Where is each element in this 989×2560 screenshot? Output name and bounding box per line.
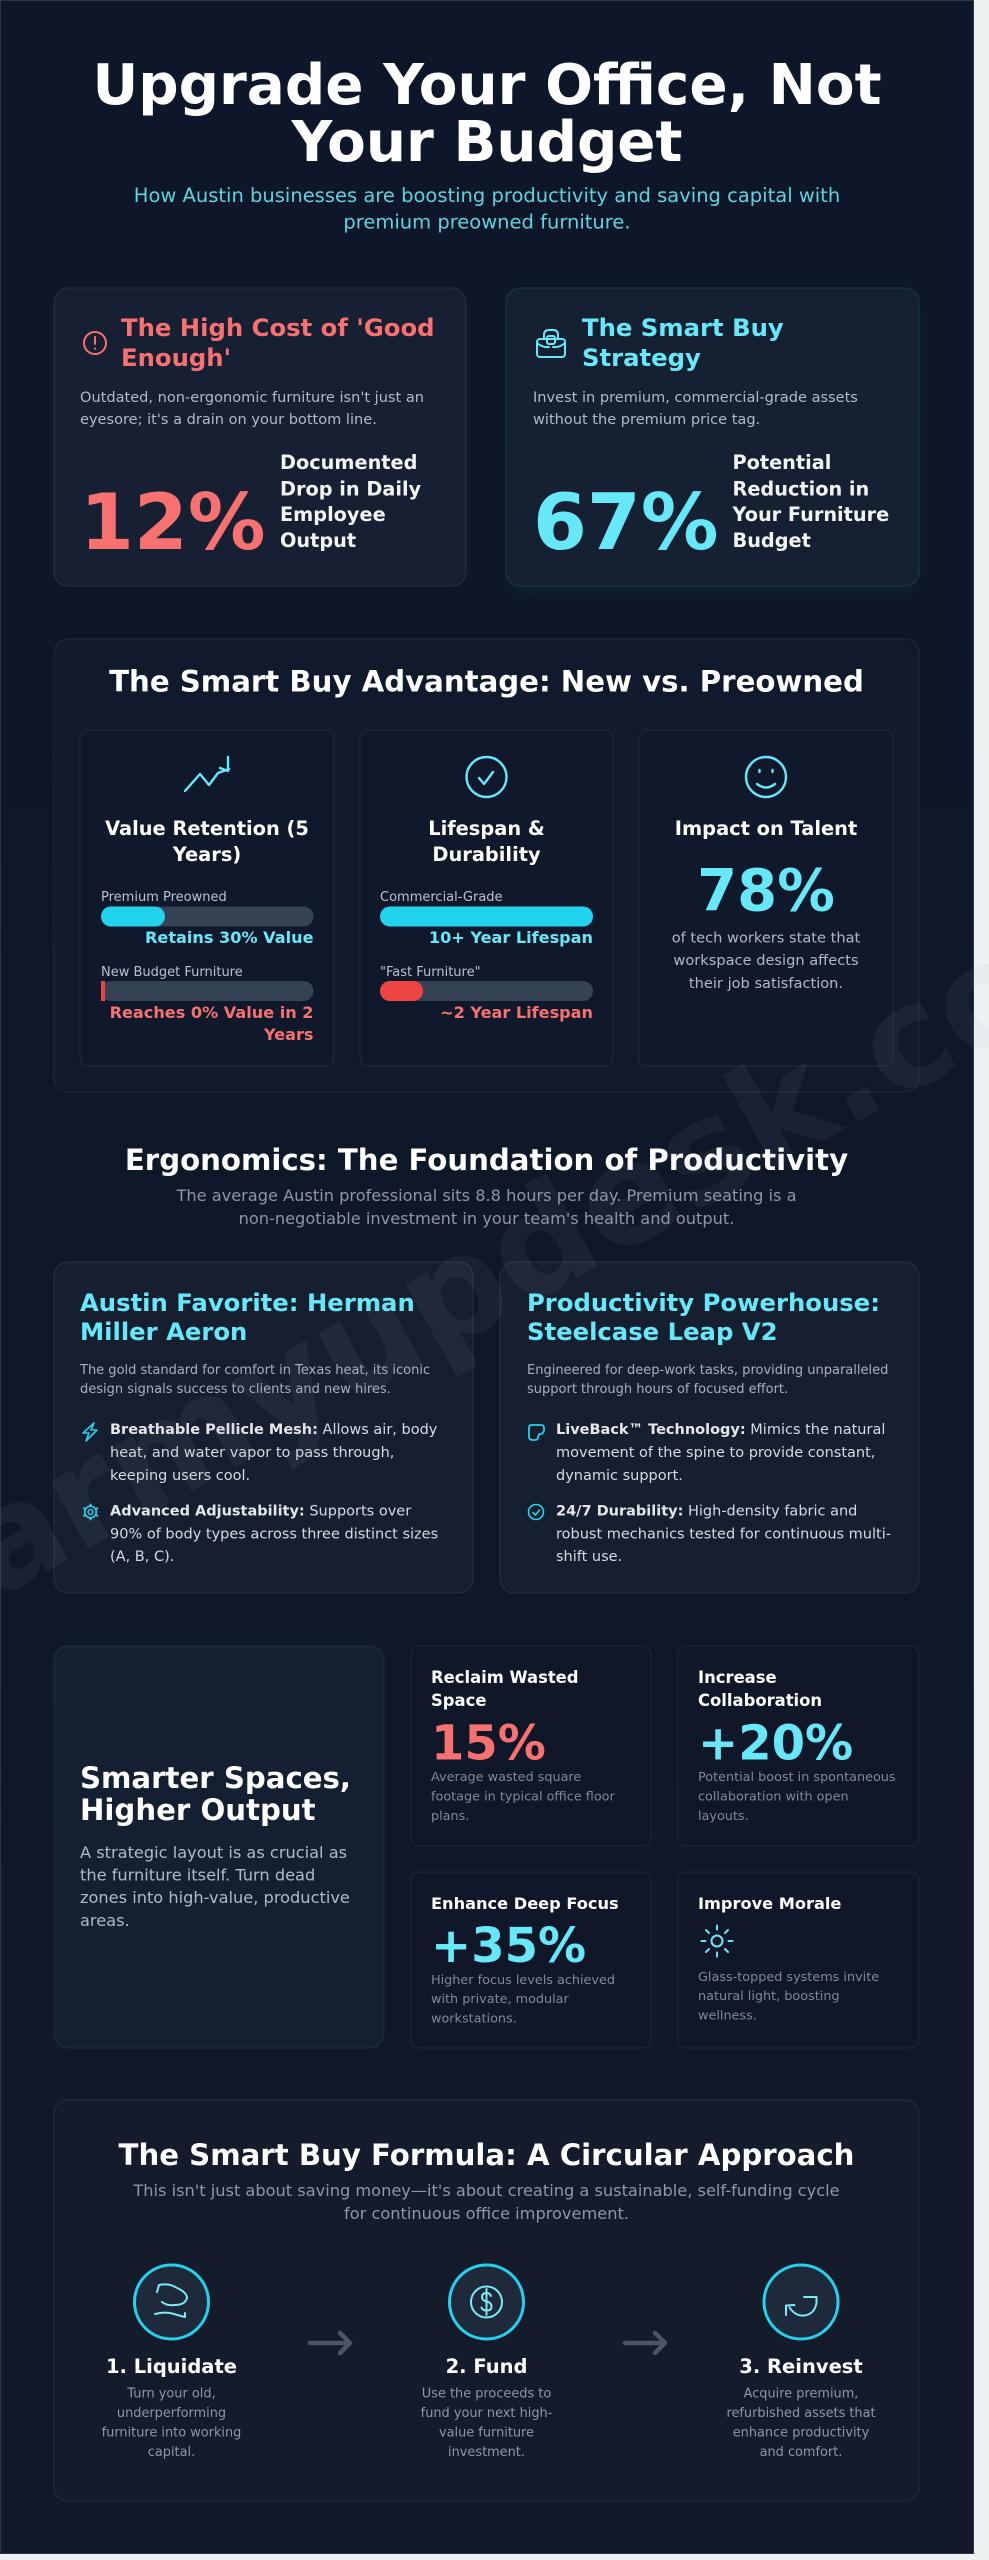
header bbox=[92, 53, 882, 234]
stat value: +35% bbox=[431, 1918, 586, 1974]
stat card: increase collaboration bbox=[678, 1646, 919, 1846]
heading: The Smart Buy Advantage: New vs. Preowned bbox=[109, 664, 864, 698]
stat description: of tech workers state that bbox=[672, 930, 861, 946]
description: A strategic layout is as crucial as bbox=[80, 1843, 347, 1862]
card: value retention bbox=[80, 730, 334, 1066]
stat label: Drop in Daily bbox=[280, 478, 422, 500]
heading: The Smart Buy bbox=[582, 313, 784, 342]
feature: breathable mesh: keeping users cool. bbox=[110, 1468, 250, 1484]
bar: new budget furniture: New Budget Furniture bbox=[101, 965, 243, 980]
card: lifespan and durability bbox=[360, 730, 613, 1066]
intro bbox=[132, 2181, 840, 2223]
stat label: Your Furniture bbox=[732, 503, 889, 526]
feature: adjustability: 90% of body types across three distinct sizes bbox=[110, 1526, 438, 1542]
bar: commercial grade: 10+ Year Lifespan bbox=[429, 928, 593, 947]
description: Engineered for deep-work tasks, providing unparalleled bbox=[527, 1363, 888, 1378]
stat label: Potential bbox=[732, 451, 831, 474]
panel: steelcase leap: Steelcase Leap V2 bbox=[527, 1317, 778, 1346]
bar: new budget furniture bbox=[101, 965, 314, 1044]
stat card: enhance deep focus bbox=[411, 1872, 651, 2048]
feature: durability: shift use. bbox=[556, 1549, 622, 1565]
stat value: 15% bbox=[431, 1716, 546, 1772]
card heading: Impact on Talent bbox=[675, 817, 857, 840]
panel: smart buy advantage bbox=[54, 639, 919, 1092]
step description: underperforming bbox=[117, 2406, 226, 2421]
stat label: Documented bbox=[280, 451, 417, 474]
heading: Productivity Powerhouse: bbox=[527, 1288, 880, 1317]
panel: smarter spaces: Higher Output bbox=[80, 1793, 316, 1827]
description bbox=[79, 1363, 430, 1397]
step description: fund your next high- bbox=[421, 2406, 553, 2421]
feature: liveback: dynamic support. bbox=[556, 1468, 683, 1484]
stat label bbox=[732, 451, 889, 552]
ergonomics intro bbox=[175, 1186, 797, 1228]
stat label bbox=[280, 451, 422, 552]
heading: The Smart Buy Formula: A Circular Approach bbox=[119, 2138, 854, 2172]
ergonomics intro: The average Austin professional sits 8.8 hours per day. Premium seating is a bbox=[175, 1186, 797, 1205]
bar: premium preowned: Retains 30% Value bbox=[145, 928, 314, 947]
step description: Use the proceeds to bbox=[422, 2386, 551, 2402]
icon: lightning bolt bbox=[83, 1423, 97, 1441]
bar: new budget furniture: Reaches 0% Value in 2 bbox=[110, 1003, 314, 1022]
icon: sun bbox=[702, 1926, 732, 1956]
description: zones into high-value, productive bbox=[80, 1888, 350, 1907]
arrow: liquidate to fund bbox=[310, 2333, 350, 2353]
icon: check circle bbox=[466, 757, 506, 797]
stat title: Increase bbox=[698, 1668, 777, 1687]
bar: premium preowned: Premium Preowned bbox=[101, 890, 227, 905]
step description: investment. bbox=[448, 2445, 525, 2460]
panel: the smart buy strategy: Strategy bbox=[582, 343, 701, 372]
intro: This isn't just about saving money—it's about creating a sustainable, self-funding cycle bbox=[132, 2181, 840, 2200]
icon: trending chart bbox=[185, 757, 229, 791]
step description: and comfort. bbox=[760, 2445, 842, 2460]
card heading: Value Retention (5 bbox=[105, 817, 309, 840]
bar: new budget furniture: Years bbox=[263, 1025, 314, 1044]
stat description: with private, modular bbox=[431, 1992, 570, 2007]
stat card: reclaim wasted space bbox=[411, 1646, 651, 1846]
feature: liveback: movement of the spine to provide constant, bbox=[556, 1445, 875, 1461]
subtitle: How Austin businesses are boosting productivity and saving capital with bbox=[134, 184, 840, 207]
stat value: +20% bbox=[698, 1716, 853, 1772]
description: Invest in premium, commercial-grade assets bbox=[533, 389, 858, 406]
stat description bbox=[431, 1770, 615, 1824]
stat: 67%: 67% bbox=[533, 478, 719, 568]
ergonomics intro: non-negotiable investment in your team's health and output. bbox=[239, 1209, 734, 1228]
stat label: Employee bbox=[280, 503, 386, 526]
feature: durability: 24/7 Durability: bbox=[556, 1504, 683, 1520]
panel: steelcase leap bbox=[500, 1262, 919, 1593]
bar: fast furniture: ~2 Year Lifespan bbox=[440, 1003, 593, 1022]
stat description: Higher focus levels achieved bbox=[431, 1973, 615, 1988]
step 1: liquidate bbox=[102, 2265, 241, 2460]
description bbox=[527, 1363, 888, 1397]
panel: the smart buy strategy: without the premium price tag. bbox=[533, 411, 760, 428]
step description: furniture into working bbox=[102, 2426, 241, 2440]
bar: commercial grade bbox=[380, 890, 593, 947]
icon: alert circle bbox=[84, 332, 106, 354]
step 2: fund bbox=[421, 2265, 553, 2460]
stat card: reclaim wasted space: Space bbox=[431, 1691, 486, 1710]
ergonomics heading: Ergonomics: The Foundation of Productivity bbox=[125, 1143, 848, 1177]
panel: herman miller aeron bbox=[54, 1262, 473, 1593]
stat label: Budget bbox=[732, 529, 811, 552]
description: design signals success to clients and new hires. bbox=[80, 1382, 391, 1397]
title second line: Your Budget bbox=[290, 110, 683, 175]
heading: Smarter Spaces, bbox=[80, 1761, 351, 1795]
description: support through hours of focused effort. bbox=[527, 1382, 788, 1397]
stat description: workstations. bbox=[431, 2012, 517, 2026]
feature: durability: High-density fabric and bbox=[688, 1504, 857, 1520]
feature: adjustability: Advanced Adjustability: bbox=[110, 1504, 305, 1520]
step description bbox=[102, 2386, 241, 2460]
stat description: workspace design affects bbox=[673, 952, 859, 969]
icon: briefcase bbox=[537, 330, 565, 357]
panel: smarter spaces bbox=[54, 1646, 384, 2048]
description: the furniture itself. Turn dead bbox=[80, 1866, 315, 1884]
feature: adjustability: Supports over bbox=[309, 1504, 411, 1520]
title: Upgrade Your Office, Not bbox=[92, 53, 882, 118]
stat title: Improve Morale bbox=[698, 1894, 841, 1913]
stat label: Reduction in bbox=[732, 478, 869, 500]
step description bbox=[421, 2386, 553, 2460]
step 3: reinvest bbox=[726, 2265, 876, 2460]
icon: reinvest circle bbox=[764, 2265, 838, 2339]
step description bbox=[726, 2386, 876, 2460]
stat title: Reclaim Wasted bbox=[431, 1668, 579, 1687]
card: lifespan and durability: Durability bbox=[432, 843, 541, 866]
card: value retention: Years) bbox=[172, 843, 241, 866]
stat description: Average wasted square bbox=[431, 1770, 581, 1785]
stat description: Glass-topped systems invite bbox=[698, 1970, 879, 1985]
icon: dollar circle bbox=[450, 2265, 524, 2339]
step description: refurbished assets that bbox=[726, 2406, 876, 2421]
panel: the smart buy strategy bbox=[506, 288, 919, 592]
bar: fast furniture bbox=[380, 965, 593, 1022]
feature: breathable mesh: Allows air, body bbox=[323, 1422, 437, 1438]
stat description: footage in typical office floor bbox=[431, 1790, 615, 1804]
description: Outdated, non-ergonomic furniture isn't just an bbox=[80, 389, 424, 406]
heading: The High Cost of 'Good bbox=[121, 313, 435, 342]
panel: smart buy formula bbox=[54, 2100, 919, 2501]
step title: 2. Fund bbox=[446, 2355, 527, 2378]
step description: enhance productivity bbox=[733, 2426, 870, 2440]
subtitle second line: premium preowned furniture. bbox=[343, 210, 631, 234]
bar: fast furniture: "Fast Furniture" bbox=[380, 965, 481, 980]
feature: adjustability: (A, B, C). bbox=[110, 1549, 174, 1565]
stat card: increase collaboration: Collaboration bbox=[698, 1691, 822, 1710]
icon: liquidate circle bbox=[134, 2265, 208, 2339]
feature: durability: robust mechanics tested for continuous multi- bbox=[556, 1526, 891, 1542]
arrow: fund to reinvest bbox=[625, 2333, 665, 2353]
stat description: layouts. bbox=[698, 1809, 749, 1824]
step title: 3. Reinvest bbox=[739, 2355, 863, 2378]
stat description: wellness. bbox=[698, 2008, 757, 2024]
feature: liveback: LiveBack™ Technology: bbox=[556, 1422, 746, 1438]
card heading: Lifespan & bbox=[428, 817, 545, 840]
description: areas. bbox=[80, 1911, 130, 1930]
stat description bbox=[431, 1973, 615, 2026]
stat label: Output bbox=[280, 529, 356, 552]
description bbox=[80, 1843, 350, 1930]
stat description: Potential boost in spontaneous bbox=[698, 1770, 896, 1785]
stat description bbox=[672, 930, 861, 992]
stat description: their job satisfaction. bbox=[689, 975, 843, 992]
step description: value furniture bbox=[439, 2426, 534, 2440]
step title: 1. Liquidate bbox=[106, 2355, 237, 2378]
bar: commercial grade: Commercial-Grade bbox=[380, 890, 503, 905]
step description: Acquire premium, bbox=[744, 2386, 858, 2402]
step description: capital. bbox=[148, 2445, 195, 2460]
feature: breathable mesh: heat, and water vapor to pass through, bbox=[110, 1445, 394, 1461]
intro: for continuous office improvement. bbox=[344, 2204, 629, 2223]
panel: herman miller aeron: Miller Aeron bbox=[80, 1317, 247, 1346]
description: The gold standard for comfort in Texas heat, its iconic bbox=[79, 1363, 430, 1378]
panel: the high cost of good enough bbox=[54, 288, 466, 586]
ergonomics heading bbox=[125, 1143, 848, 1228]
stat title: Enhance Deep Focus bbox=[431, 1894, 619, 1913]
feature: breathable mesh: Breathable Pellicle Mesh: bbox=[110, 1422, 318, 1438]
card: impact on talent bbox=[639, 730, 893, 1066]
heading: Austin Favorite: Herman bbox=[80, 1288, 415, 1317]
icon: smile bbox=[746, 757, 786, 797]
stat description bbox=[698, 1770, 896, 1824]
bar: premium preowned bbox=[101, 890, 314, 947]
feature: liveback: Mimics the natural bbox=[750, 1422, 885, 1438]
stat description: collaboration with open bbox=[698, 1790, 849, 1804]
icon: check badge bbox=[528, 1504, 544, 1520]
step description: Turn your old, bbox=[126, 2386, 216, 2402]
icon: chair back bbox=[529, 1425, 544, 1440]
stat description bbox=[698, 1970, 879, 2024]
stat: 78%: 78% bbox=[697, 858, 835, 924]
panel: the high cost of good enough: eyesore; it's a drain on your bottom line. bbox=[80, 411, 377, 428]
panel: the high cost of good enough: Enough' bbox=[121, 343, 231, 372]
stat card: improve morale bbox=[678, 1872, 919, 2048]
stat: 12%: 12% bbox=[80, 478, 266, 568]
stat description: plans. bbox=[431, 1809, 469, 1824]
icon: gear bbox=[84, 1504, 97, 1520]
stat description: natural light, boosting bbox=[698, 1989, 840, 2004]
